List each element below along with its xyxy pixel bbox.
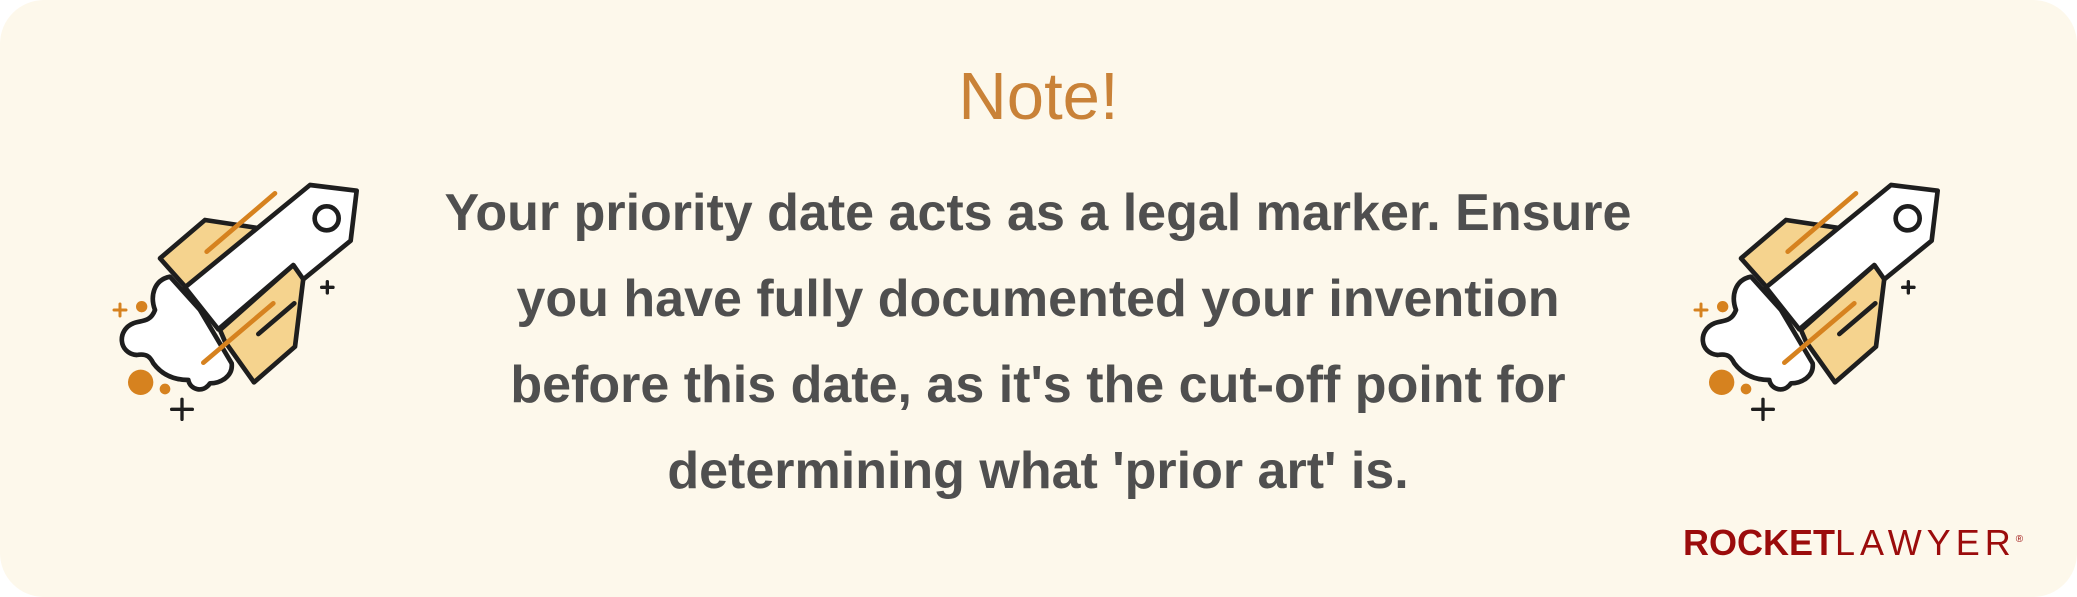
text block: note <box>445 184 1631 500</box>
text block: note: before this date, as it's the cut-off point for <box>510 356 1566 414</box>
icon: rocket left <box>112 182 359 421</box>
icon: rocket right <box>1694 182 1940 421</box>
title: Note! <box>958 59 1119 134</box>
logo: Rocket Lawyer: ROCKETLAWYER® <box>1683 522 2023 563</box>
text block: note: Your priority date acts as a legal marker. Ensure <box>445 184 1631 242</box>
text block: note: determining what 'prior art' is. <box>667 442 1409 500</box>
text block: note: you have fully documented your invention <box>516 270 1560 328</box>
